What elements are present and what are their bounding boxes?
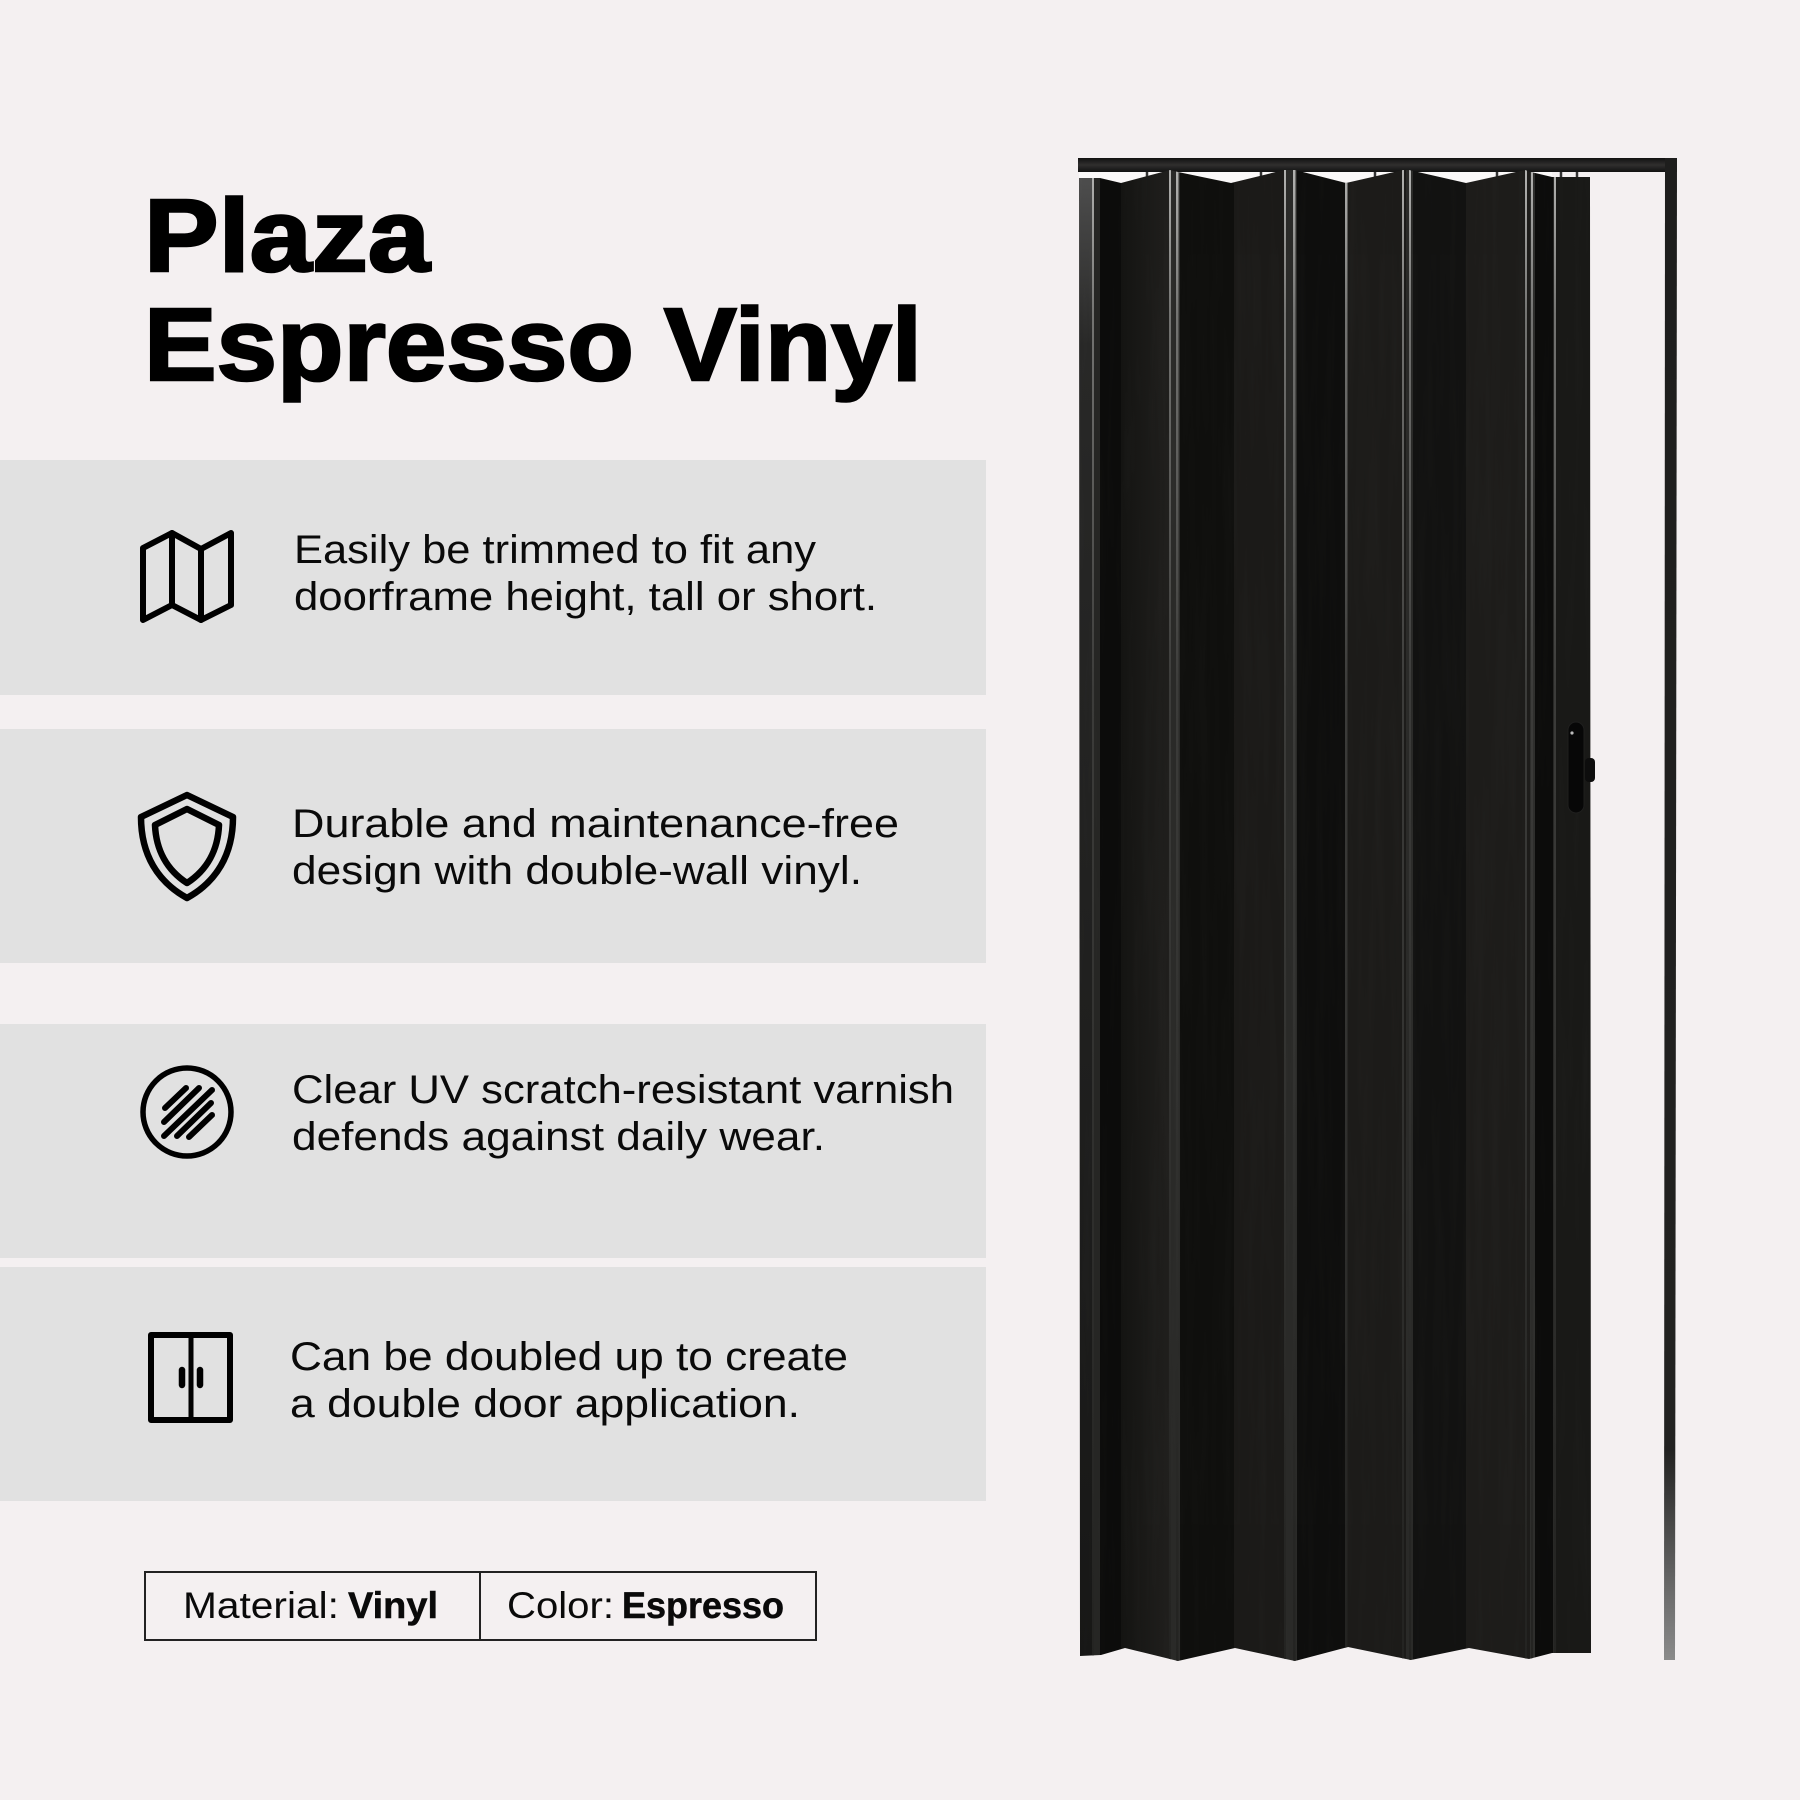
title: Espresso Vinyl [144,287,922,402]
text: double door: Can be doubled up to create [290,1335,848,1379]
ridge highlights [1092,165,1556,1665]
text: durable [292,802,899,893]
text: durable: design with double-wall vinyl. [292,849,862,893]
title [144,178,922,402]
text: scratch resistant [292,1068,954,1159]
spec: material: Vinyl [348,1585,438,1626]
spec: color [507,1585,784,1626]
door handle [1568,722,1595,813]
panel: scratch resistant [0,1024,986,1258]
panel: double door [0,1267,986,1501]
spec: color: Color: [507,1585,614,1626]
wood grain texture [1079,165,1591,1665]
panel: trim to fit [0,460,986,695]
icon: shield [141,795,233,898]
gap behind door [1079,172,1552,186]
text: trim to fit [294,528,877,619]
text: trim to fit: doorframe height, tall or short. [294,575,877,619]
hangers [1147,172,1577,179]
text: double door: a double door application. [290,1382,800,1426]
spec table [145,1572,816,1640]
door frame: top rail [1078,158,1677,172]
text: trim to fit: Easily be trimmed to fit any [294,528,816,572]
infographic canvas [0,158,1677,1661]
door panels [1079,165,1591,1665]
product image: folding door [1078,158,1677,1665]
text: double door [290,1335,848,1426]
spec: material [183,1585,438,1626]
spec: color: Espresso [622,1585,784,1626]
icon: folded map [143,533,231,620]
panel: durable [0,729,986,963]
icon: hatched circle [143,1068,231,1156]
title: Plaza [144,178,431,293]
door frame: right post [1664,158,1677,1660]
text: scratch resistant: Clear UV scratch-resistant varnish [292,1068,954,1112]
text: durable: Durable and maintenance-free [292,802,899,846]
spec: material: Material: [183,1585,339,1626]
icon: double door [151,1335,230,1420]
text: scratch resistant: defends against daily wear. [292,1115,825,1159]
